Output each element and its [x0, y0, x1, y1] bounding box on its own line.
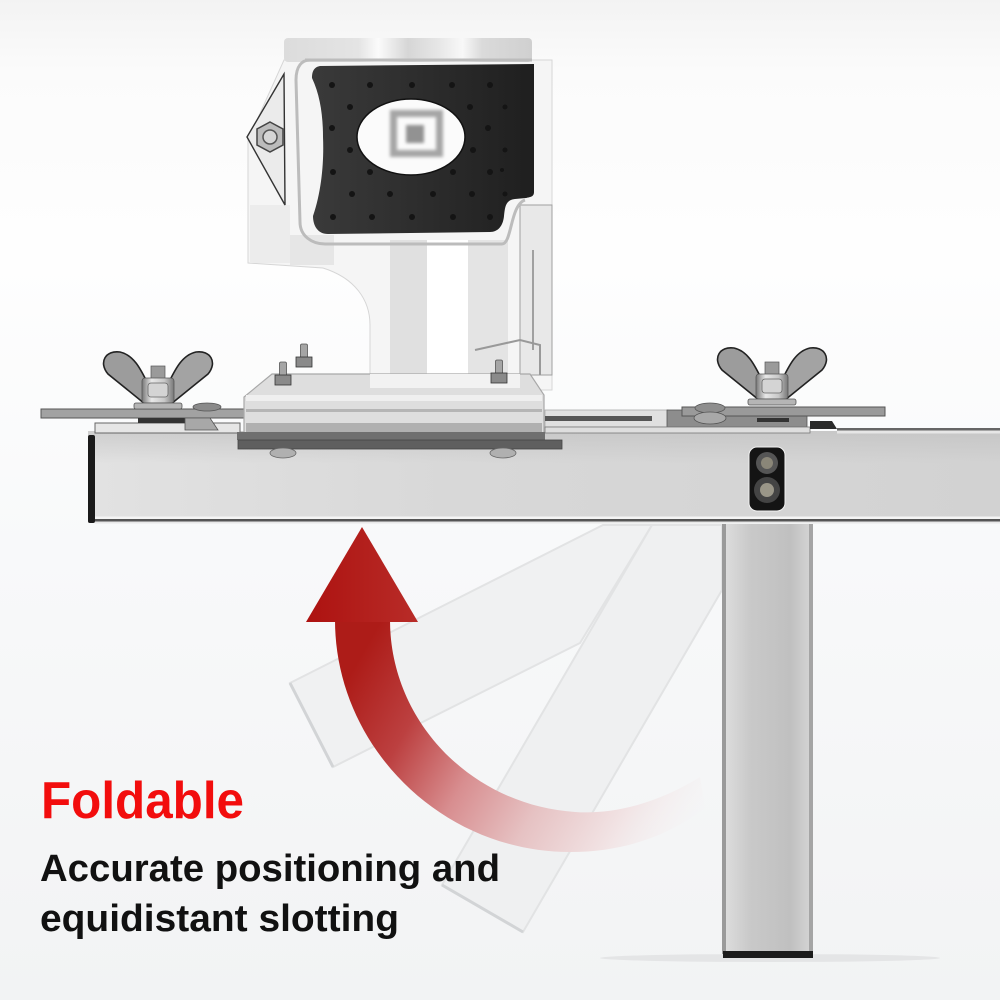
side screw: [257, 122, 283, 152]
blurred QR mark: [390, 110, 443, 157]
clear top cap: [284, 38, 532, 62]
wing nut right: [718, 348, 826, 405]
guide plate right: [545, 403, 885, 433]
description text line 1: Accurate positioning and: [40, 848, 500, 890]
logo oval: [357, 99, 465, 175]
base bolts: [275, 344, 507, 385]
grip dots: [329, 82, 508, 220]
heading: Foldable: Foldable: [41, 772, 244, 830]
clear body side profile: [248, 60, 552, 390]
wing nut left: [104, 352, 212, 409]
clamp bar: [237, 432, 562, 458]
table leg: [600, 524, 940, 962]
router tool: [244, 38, 552, 433]
clear base: [244, 374, 544, 433]
black grip: [312, 64, 534, 234]
table beam: [88, 428, 1000, 524]
description text line 2: equidistant slotting: [40, 898, 399, 940]
grip frame: [296, 60, 532, 244]
red curved arrow: [306, 527, 705, 852]
guide plate left: [41, 403, 246, 433]
ghost positions of folding leg: [290, 525, 722, 932]
body stripes: [250, 205, 552, 390]
side triangle bracket: [247, 74, 285, 205]
slot with screws: [749, 447, 785, 511]
